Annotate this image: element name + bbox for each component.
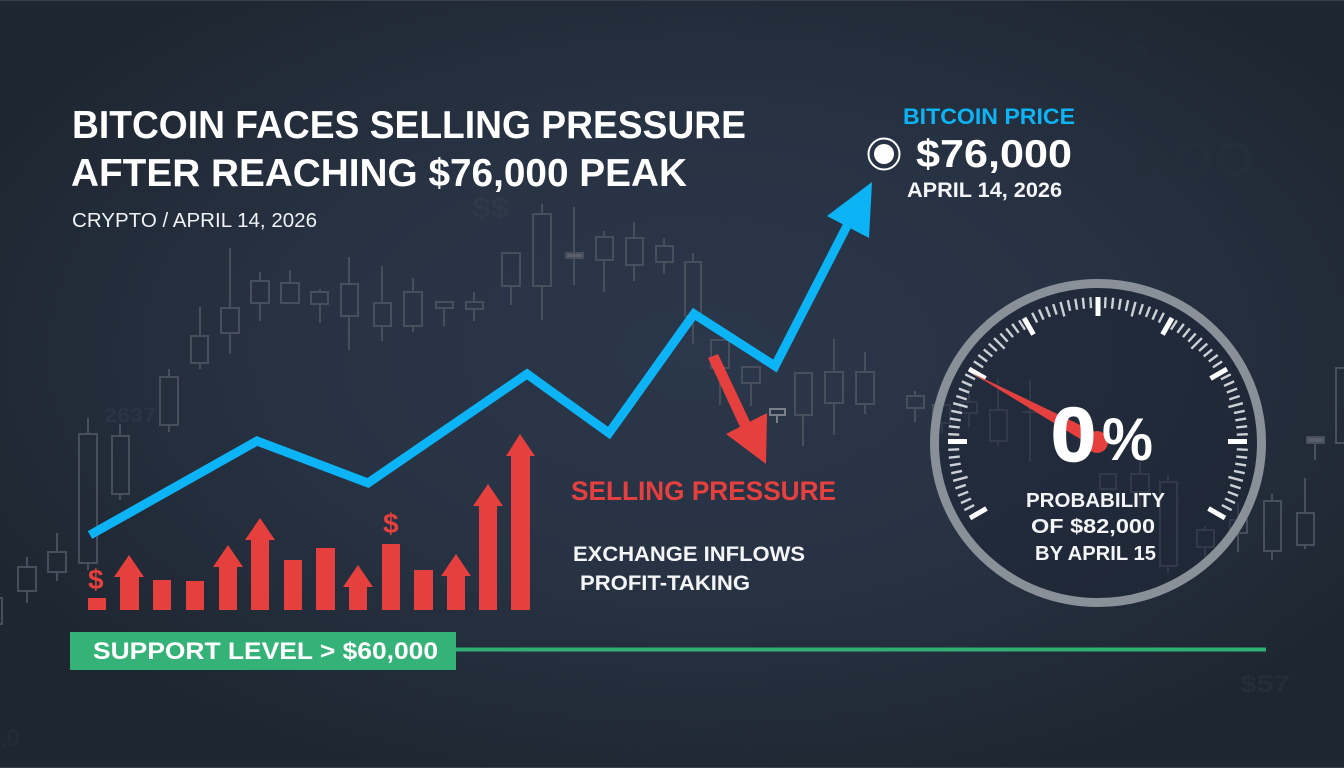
faint background numerals: .0 (0, 725, 20, 752)
support level marker (70, 632, 1266, 670)
title (71, 104, 746, 195)
support label (70, 632, 456, 670)
faint background numerals: AOO (1136, 134, 1254, 187)
support level marker: SUPPORT LEVEL > $60,000 (93, 638, 438, 665)
red selling pressure arrow (708, 354, 767, 464)
gauge needle (972, 373, 1108, 453)
selling pressure reasons: PROFIT-TAKING (580, 571, 750, 595)
bitcoin price callout (868, 104, 1075, 202)
gauge major ticks (948, 297, 1247, 518)
selling pressure reasons: EXCHANGE INFLOWS (573, 542, 805, 566)
gauge (934, 284, 1262, 602)
price date: APRIL 14, 2026 (907, 179, 1062, 202)
gauge caption: BY APRIL 15 (1035, 542, 1156, 565)
price value: $76,000 (916, 133, 1072, 176)
gauge caption: OF $82,000 (1031, 515, 1155, 538)
gauge caption (1026, 489, 1165, 565)
selling pressure heading: SELLING PRESSURE (571, 476, 836, 506)
candlestick background chart (0, 204, 1344, 624)
faint background numerals: $57 (1240, 671, 1290, 698)
gauge minor ticks (948, 297, 1248, 510)
faint background numerals: 6 (408, 505, 430, 549)
gauge caption: PROBABILITY (1026, 489, 1165, 512)
gauge dial and rim (934, 284, 1262, 602)
title: AFTER REACHING $76,000 PEAK (71, 152, 687, 195)
red volume bars and arrows (88, 434, 535, 610)
red volume bars and arrows: $ (88, 564, 104, 595)
category and date line: CRYPTO / APRIL 14, 2026 (72, 209, 317, 232)
label: bitcoin price: BITCOIN PRICE (903, 104, 1075, 129)
gauge value: % (1102, 406, 1153, 473)
faint background numerals: $ (1127, 27, 1148, 69)
faint background numerals: $$ (472, 192, 509, 225)
blue price line with arrow (90, 182, 872, 535)
title: BITCOIN FACES SELLING PRESSURE (72, 104, 746, 147)
gauge value: 0 (1051, 393, 1096, 478)
red volume bars and arrows: $ (383, 508, 399, 539)
icon: price marker (868, 138, 900, 170)
selling pressure reasons (573, 542, 805, 595)
faint background numerals: 2637 (104, 405, 156, 427)
gauge value (1051, 393, 1153, 478)
support line (456, 648, 1266, 652)
